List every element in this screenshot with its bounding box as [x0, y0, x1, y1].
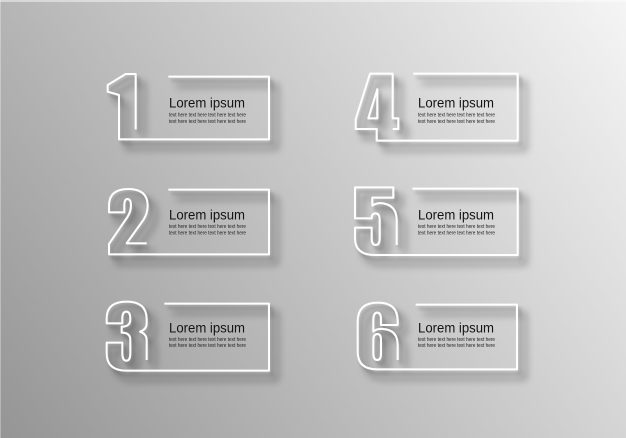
body text 6 — [418, 337, 495, 349]
body text 1: text here text here text here text here — [169, 112, 246, 118]
panel: item 4 — [356, 74, 518, 141]
number 4 and frame outline — [356, 74, 518, 141]
body text 5: text here text here text here text here — [418, 224, 495, 230]
body text 1 — [169, 112, 246, 125]
number 3 and frame outline — [107, 302, 269, 371]
panel: item 5 — [355, 187, 518, 255]
heading 4: Lorem ipsum — [418, 96, 494, 111]
heading 2: Lorem ipsum — [169, 207, 245, 222]
panel: item 2 — [109, 189, 269, 254]
heading 3: Lorem ipsum — [169, 320, 245, 335]
panel: item 6 — [358, 303, 517, 369]
body text 3 — [169, 337, 246, 349]
body text 3: text here text here text here text here — [169, 343, 246, 349]
heading 1: Lorem ipsum — [169, 96, 245, 111]
number 2 and frame outline — [109, 189, 269, 254]
heading 6: Lorem ipsum — [418, 320, 494, 335]
body text 6: text here text here text here text here — [418, 343, 495, 349]
body text 5 — [418, 224, 495, 236]
heading 5: Lorem ipsum — [418, 207, 494, 222]
number 5 and frame outline — [355, 187, 518, 255]
panel: item 3 — [107, 302, 269, 371]
body text 2: text here text here text here text here — [169, 230, 246, 236]
body text 6: text here text here text here text here — [418, 337, 495, 343]
body text 4: text here text here text here text here — [418, 112, 495, 118]
body text 4 — [418, 112, 495, 125]
body text 1: text here text here text here text here — [169, 119, 246, 125]
number 6 and frame outline — [358, 303, 517, 369]
panel: item 1 — [108, 74, 269, 139]
body text 5: text here text here text here text here — [418, 230, 495, 236]
body text 2: text here text here text here text here — [169, 224, 246, 230]
number 1 and frame outline — [108, 74, 269, 139]
body text 2 — [169, 224, 246, 236]
body text 3: text here text here text here text here — [169, 337, 246, 343]
body text 4: text here text here text here text here — [418, 119, 495, 125]
